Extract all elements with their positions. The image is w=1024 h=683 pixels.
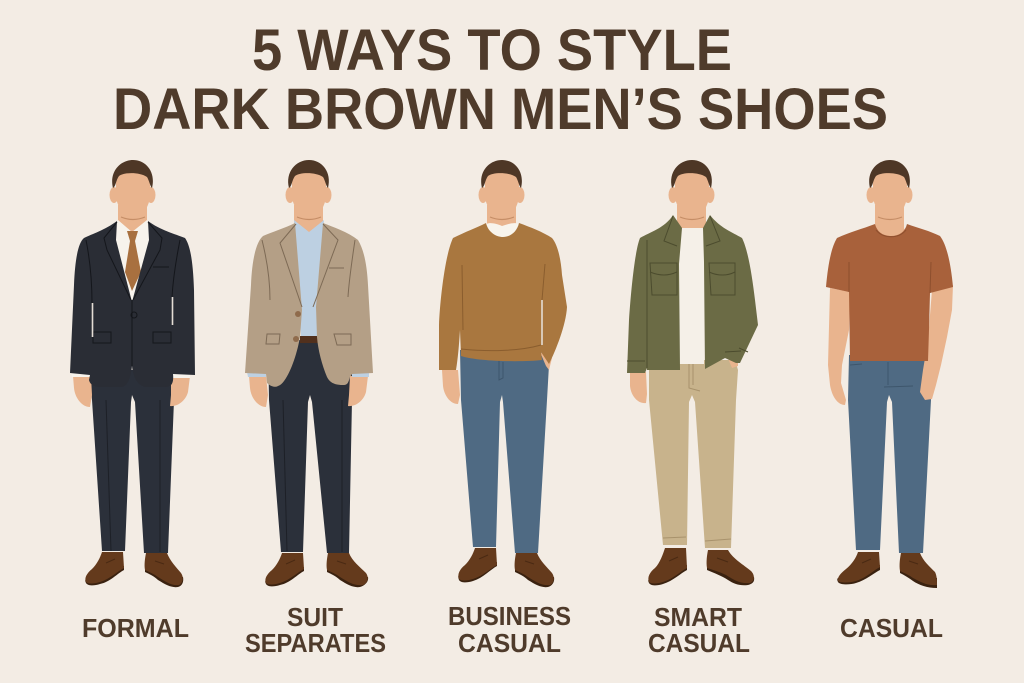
shoes: formal	[85, 552, 183, 587]
shirt: light blue	[294, 220, 324, 336]
figure: casual outfit	[826, 160, 953, 588]
head: suit separates	[286, 160, 332, 240]
head: business casual	[478, 160, 524, 240]
trousers: dark navy	[268, 340, 352, 553]
t-shirt: rust	[826, 224, 953, 361]
label: suit separates: SEPARATES	[245, 628, 386, 658]
label: smart casual	[648, 602, 750, 658]
arms: bare skin	[828, 285, 953, 405]
collar: white shirt	[486, 223, 519, 237]
figure: business casual outfit	[439, 160, 567, 587]
blazer buttons	[293, 311, 301, 342]
head: formal	[110, 160, 156, 240]
label: business casual	[448, 601, 571, 658]
blazer: tan	[245, 223, 373, 387]
trousers: blue jeans	[848, 355, 931, 553]
label: business casual: BUSINESS	[448, 601, 571, 631]
head: smart casual	[668, 160, 714, 240]
trousers: blue denim	[460, 350, 549, 553]
t-shirt: white	[679, 228, 704, 364]
label: casual: CASUAL	[840, 613, 943, 643]
label: suit separates: SUIT	[287, 602, 343, 632]
shirt cuffs: blue	[247, 372, 369, 377]
shoes: suit separates	[265, 553, 368, 587]
figure: formal outfit	[70, 160, 195, 587]
shirt cuffs: formal	[71, 372, 190, 378]
shirt and tie	[115, 220, 150, 310]
overshirt: olive	[627, 215, 758, 373]
figure: smart casual outfit	[627, 160, 758, 585]
label: business casual: CASUAL	[458, 628, 561, 658]
label: formal: FORMAL	[82, 613, 189, 643]
sweater details	[461, 264, 545, 351]
arm gap: business casual	[541, 300, 543, 345]
shoes: casual	[837, 552, 937, 588]
shoes: business casual	[458, 548, 554, 587]
belt: brown	[300, 336, 318, 343]
overshirt details	[627, 216, 748, 368]
jacket details: formal	[86, 222, 180, 366]
title: DARK BROWN MEN’S SHOES	[113, 77, 888, 142]
hands: suit separates	[249, 376, 368, 407]
trousers: khaki	[649, 360, 738, 548]
title: 5 WAYS TO STYLE	[252, 18, 732, 83]
trousers: charcoal	[90, 370, 174, 553]
t-shirt collar and seams	[849, 230, 931, 293]
shoes: smart casual	[648, 548, 754, 585]
sweater: camel	[439, 223, 567, 370]
figure: suit separates outfit	[245, 160, 373, 587]
label: smart casual: CASUAL	[648, 628, 750, 658]
arm gaps: formal	[92, 297, 172, 337]
head: casual	[866, 160, 912, 240]
label: smart casual: SMART	[654, 602, 742, 632]
title	[113, 18, 888, 142]
hands: formal	[73, 376, 190, 407]
blazer details	[262, 224, 355, 345]
hands: business casual	[442, 352, 552, 404]
hands: smart casual	[630, 355, 738, 403]
label: suit separates	[245, 602, 386, 658]
suit jacket: dark navy	[70, 221, 195, 387]
